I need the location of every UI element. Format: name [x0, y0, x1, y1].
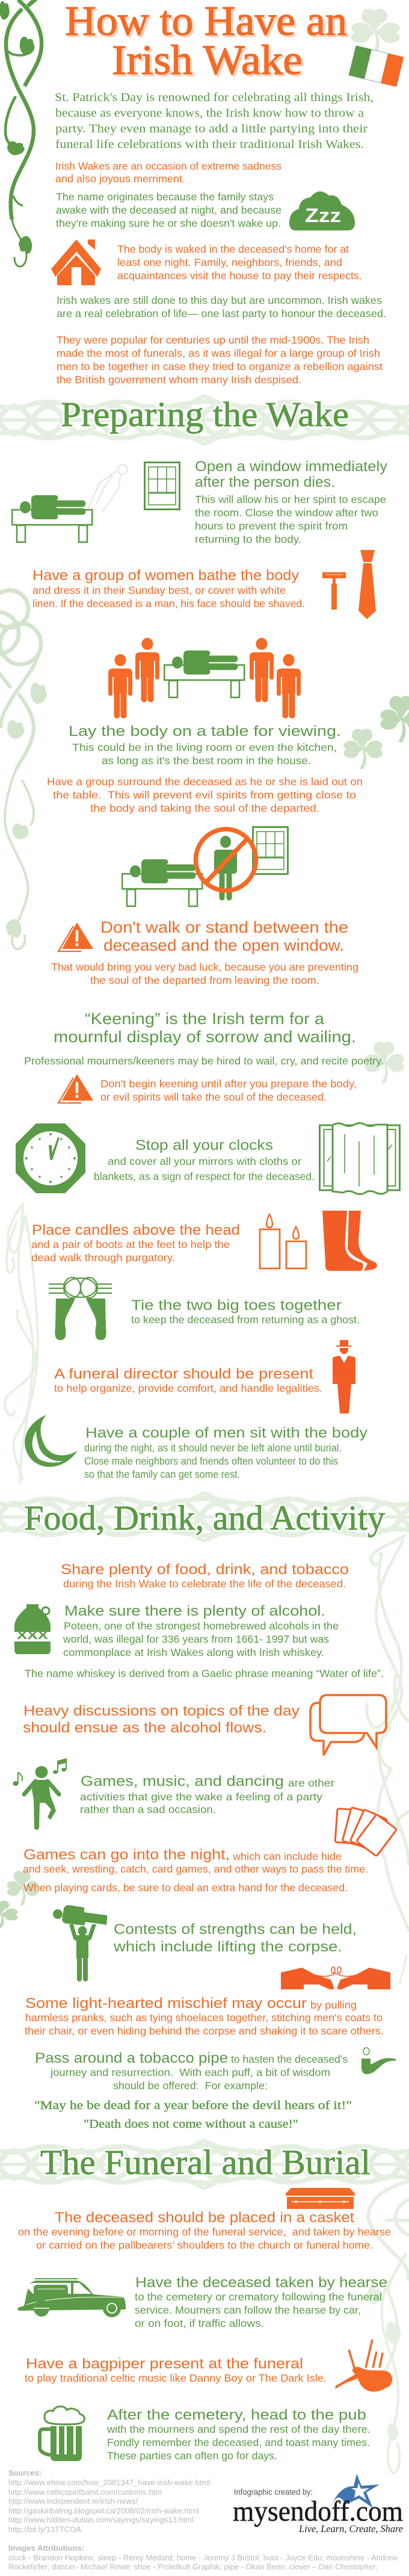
- text: don't begin keening: or evil spirits will take the soul of the deceased.: [100, 1091, 327, 1103]
- text: don't walk: That would bring you very bad luck, because you are preventing: [51, 961, 358, 973]
- title: Irish Wake: [112, 37, 303, 84]
- text: sayings: [34, 2099, 352, 2131]
- background: faint vine middle left: [5, 1203, 38, 1484]
- text: still done today: are a real celebration of life— one last party to honour the deceased.: [57, 307, 386, 320]
- background: shamrocks: [0, 8, 409, 1928]
- icon: dancer with music notes: [13, 1758, 67, 1830]
- icon: ghost rising from body: [12, 465, 128, 542]
- text: taken by hearse: [135, 2275, 387, 2329]
- text: games into the night: When playing cards, be sure to deal an extra hand for the deceased.: [23, 1882, 348, 1894]
- text: name origin: they're making sure he or she doesn't wake up.: [56, 217, 281, 229]
- sources: Sources:: [8, 2469, 42, 2477]
- icon: Irish flag: [349, 46, 404, 87]
- text: taken by hearse: to the cemetery or crematory following the funeral: [135, 2291, 382, 2303]
- text: body waked at home: least one night. Family, neighbors, friends, and: [117, 256, 342, 268]
- text: funeral director: A funeral director should be present: [54, 1366, 313, 1382]
- text: candles and boots: dead walk through purgatory.: [31, 1252, 175, 1264]
- text: plenty of alcohol: commonplace at Irish Wakes along with Irish whiskey.: [63, 1646, 324, 1658]
- logo: mysendoff.com: mysendoff.com: [233, 2495, 403, 2527]
- text: tobacco pipe: journey and resurrection. With each puff, a bit of wisdom: [50, 2066, 330, 2078]
- sources: http://www.hidden-dublin.com/sayings/sayings13.html: [8, 2516, 194, 2524]
- text: head to the pub: After the cemetery, head to the pub: [107, 2407, 366, 2423]
- icon: playing cards: [335, 1808, 397, 1856]
- text: open a window: returning to the body.: [195, 533, 301, 545]
- text: open a window: after the person dies.: [195, 474, 335, 490]
- icon: sleep cloud: Zzz: [305, 205, 341, 226]
- text: share plenty: during the Irish Wake to celebrate the life of the deceased.: [63, 1578, 346, 1590]
- text: contests of strength: [113, 1921, 357, 1955]
- text: funeral director: to help organize, provide comfort, and handle legalities.: [54, 1382, 322, 1394]
- heading: Preparing the Wake: Preparing the Wake: [61, 395, 349, 434]
- sources: http://bit.ly/13TTCOA: [8, 2525, 82, 2534]
- text: sit with the body: Close male neighbors and friends often volunteer to do this: [84, 1455, 338, 1467]
- sources: http://www.celticspiritband.com/customs.htm: [8, 2488, 162, 2497]
- text: heavy discussions: [23, 1703, 300, 1736]
- text: name origin: The name originates because the family stays: [56, 191, 274, 203]
- text: don't begin keening: Don't begin keening until after you prepare the body,: [100, 1078, 357, 1090]
- icon: pipe: [361, 2048, 396, 2074]
- text: mischief: harmless pranks, such as tying shoelaces together, stitching men's coats to: [25, 2012, 383, 2024]
- text: placed in a casket: The deceased should be placed in a casket: [55, 2210, 354, 2226]
- text: open a window: the room. Close the window after two: [195, 507, 378, 519]
- text: contests of strength: which include lifting the corpse.: [113, 1939, 342, 1955]
- text: tobacco pipe: should be offered: For example:: [113, 2080, 268, 2092]
- text: games music dancing: rather than a sad occasion.: [80, 1803, 216, 1815]
- text: tobacco pipe: [35, 2050, 348, 2092]
- text: bagpiper: [25, 2356, 327, 2384]
- background: faint vine right middle: [367, 1536, 409, 1985]
- text: lay the body: This could be in the living room or even the kitchen,: [72, 741, 337, 753]
- background: faint celtic knot: [0, 590, 41, 664]
- icon: moonshine jug: [14, 1604, 51, 1654]
- text: share plenty: Share plenty of food, drink, and tobacco: [61, 1561, 349, 1578]
- text: extreme sadness: [55, 160, 281, 185]
- image attributions: [8, 2544, 398, 2571]
- icon: beer mug: [40, 2406, 84, 2461]
- text: lay the body: Lay the body on a table for viewing.: [69, 723, 341, 740]
- text: body waked at home: [117, 243, 362, 282]
- icon: casket: [286, 2188, 355, 2209]
- text: name origin: [56, 191, 281, 229]
- text: body waked at home: acquaintances visit the house to pay their respects.: [117, 270, 362, 282]
- text: games music dancing: Games, music, and dancing: [81, 1773, 284, 1790]
- text: plenty of alcohol: Make sure there is plenty of alcohol.: [64, 1603, 325, 1619]
- icon: funeral director: [333, 1340, 355, 1413]
- text: surround the deceased: Have a group surround the deceased as he or she is laid out on: [47, 776, 363, 788]
- text: bathe the body: Have a group of women bathe the body: [32, 567, 300, 584]
- sources: http://www.independent.ie/irish-news/: [8, 2497, 138, 2506]
- title: How to Have an: [67, 0, 349, 46]
- text: taken by hearse: or on foot, if traffic allows.: [135, 2317, 264, 2329]
- text: tie toes: [131, 1297, 360, 1326]
- text: surround the deceased: the body and taking the soul of the departed.: [90, 802, 319, 814]
- text: placed in a casket: on the evening before or morning of the funeral service, and taken by hearse: [18, 2226, 391, 2238]
- icon: house: [51, 239, 101, 285]
- text: contests of strength: Contests of strengths can be held,: [114, 1921, 357, 1938]
- text: games into the night: [23, 1847, 368, 1894]
- text: surround the deceased: the table. This will prevent evil spirits from getting close to: [53, 789, 356, 801]
- image attributions: clock - Brandon Hopkins; sleep - Rémy Médard; home - Jeremy J Bristol; boot - Joyce Edu; moonshine - Andrew: [8, 2554, 398, 2562]
- text: open a window: hours to prevent the spirit from: [195, 520, 348, 532]
- icon: necktie: [358, 550, 376, 619]
- icon: hearse: [18, 2279, 126, 2317]
- icon: crescent moon: [25, 1415, 78, 1467]
- text: keening: mournful display of sorrow and wailing.: [54, 1028, 356, 1046]
- icon: shoes tied: [281, 1967, 390, 1989]
- text: don't walk: Don't walk or stand between the: [100, 918, 348, 936]
- icon: group surrounding body: [108, 638, 301, 715]
- text: don't walk: deceased and the open window.: [103, 936, 344, 954]
- text: plenty of alcohol: The name whiskey is derived from a Gaelic phrase meaning “Water of life”.: [25, 1667, 384, 1679]
- icon: warning triangle 2: [58, 1074, 93, 1103]
- logo: mysendoff.com: [233, 2474, 403, 2534]
- text: history: made the most of funerals, as it was illegal for a large group of Irish: [57, 347, 380, 359]
- text: tie toes: Tie the two big toes together: [131, 1297, 342, 1314]
- text: keening: “Keening” is the Irish term for a: [85, 1010, 325, 1028]
- text: head to the pub: These parties can often go for days.: [107, 2450, 277, 2462]
- icon: warning triangle: [58, 922, 93, 951]
- text: body waked at home: The body is waked in the deceased's home for at: [117, 243, 349, 255]
- intro paragraph: party. They even manage to add a little partying into their: [55, 122, 367, 135]
- icon: sleep cloud: [289, 191, 355, 230]
- text: games music dancing: [80, 1773, 334, 1815]
- title: [65, 0, 349, 85]
- icon: boots: [322, 1211, 377, 1271]
- text: still done today: Irish wakes are still done to this day but are uncommon. Irish wakes: [57, 294, 382, 306]
- icon: do not stand between body and window: [122, 827, 288, 906]
- text: open a window: This will allow his or her spirit to escape: [195, 493, 386, 505]
- image attributions: Rockefeller; dancer- Michael Rowe; shoe - Proletkult Graphik; pipe - Okan Benn; clover – Dan Christopher;: [8, 2563, 378, 2571]
- text: stop clocks: blankets, as a sign of respect for the deceased.: [94, 1170, 315, 1182]
- text: plenty of alcohol: Poteen, one of the strongest homebrewed alcohols in the: [64, 1620, 339, 1632]
- text: tobacco pipe: Pass around a tobacco pipe: [35, 2050, 228, 2066]
- text: plenty of alcohol: [25, 1603, 384, 1679]
- intro paragraph: St. Patrick's Day is renowned for celebrating all things Irish,: [55, 91, 374, 104]
- text: history: the British government whom many Irish despised.: [57, 374, 301, 386]
- text: games music dancing: activities that give the wake a feeling of a party: [80, 1791, 322, 1803]
- intro paragraph: because as everyone knows, the Irish know how to throw a: [55, 107, 364, 120]
- text: lay the body: [69, 723, 341, 767]
- icon: covered mirror: [320, 1123, 399, 1194]
- text: head to the pub: [106, 2407, 371, 2462]
- text: stop clocks: and cover all your mirrors with cloths or: [108, 1155, 301, 1167]
- text: heavy discussions: should ensue as the alcohol flows.: [23, 1720, 266, 1736]
- heading: Preparing the Wake: [0, 395, 409, 444]
- text: bagpiper: to play traditional celtic music like Danny Boy or The Dark Isle.: [25, 2372, 327, 2384]
- icon: candles: [260, 1214, 306, 1268]
- title: Irish Wake: [112, 37, 303, 84]
- icon: bagpipes: [335, 2340, 392, 2392]
- icon: razor: [322, 572, 346, 610]
- text: history: men to be together in case they tried to organize a rebellion against: [57, 360, 383, 372]
- background: faint vine right lower: [367, 2181, 409, 2473]
- intro paragraph: [55, 91, 374, 151]
- heading: The Funeral and Burial: [0, 2140, 409, 2188]
- icon: lifting the corpse: [53, 1905, 107, 1979]
- sources: http://www.ehow.com/how_2081347_have-irish-wake.html: [8, 2479, 210, 2487]
- text: bathe the body: and dress it in their Sunday best, or cover with white: [32, 584, 286, 596]
- text: stop clocks: [94, 1137, 315, 1182]
- text: history: [57, 334, 383, 386]
- text: heavy discussions: Heavy discussions on topics of the day: [23, 1703, 300, 1719]
- text: sit with the body: during the night, as it should never be left alone until burial.: [84, 1442, 342, 1454]
- icon: window: [144, 462, 179, 509]
- text: sit with the body: so that the family can get some rest.: [84, 1468, 240, 1480]
- icon: toes tied: [49, 1277, 112, 1340]
- text: bathe the body: [32, 567, 305, 610]
- text: open a window: Open a window immediately: [195, 459, 388, 475]
- text: tie toes: to keep the deceased from returning as a ghost.: [131, 1314, 360, 1326]
- text: open a window: [195, 459, 388, 545]
- text: candles and boots: Place candles above the head: [32, 1222, 240, 1238]
- text: tobacco pipe: to hasten the deceased's: [231, 2053, 348, 2065]
- text: taken by hearse: service. Mourners can follow the hearse by car,: [135, 2304, 361, 2316]
- heading: Food, Drink, and Activity: Food, Drink, and Activity: [24, 1498, 385, 1537]
- text: name origin: awake with the deceased at night, and because: [56, 204, 281, 216]
- text: keening: Professional mourners/keeners may be hired to wail, cry, and recite poetry.: [24, 1055, 384, 1067]
- text: funeral director: [54, 1366, 322, 1394]
- text: mischief: Some light-hearted mischief may occur: [25, 1995, 307, 2012]
- text: lay the body: as long as it's the best room in the house.: [102, 755, 311, 767]
- heading: The Funeral and Burial: The Funeral and Burial: [40, 2143, 371, 2182]
- text: sit with the body: Have a couple of men sit with the body: [85, 1425, 368, 1441]
- background: faint vine upper left: [0, 650, 47, 949]
- text: bagpiper: Have a bagpiper present at the funeral: [26, 2356, 303, 2372]
- heading: Food, Drink, and Activity: Food, Drink, and Activity: [24, 1498, 385, 1537]
- icon: moonshine jug: XXX: [17, 1629, 48, 1642]
- image attributions: Images Attributions:: [8, 2544, 84, 2553]
- text: still done today: [57, 294, 386, 320]
- text: candles and boots: and a pair of boots at the feet to help the: [31, 1238, 230, 1250]
- text: head to the pub: with the mourners and spend the rest of the day there.: [106, 2423, 371, 2435]
- heading: Preparing the Wake: Preparing the Wake: [61, 395, 349, 434]
- text: bathe the body: linen. If the deceased is a man, his face should be shaved.: [32, 598, 305, 610]
- left vine: [0, 0, 42, 267]
- logo: mysendoff.com: Live, Learn, Create, Share: [298, 2523, 403, 2534]
- text: games into the night: Games can go into the night,: [23, 1847, 230, 1863]
- text: games music dancing: are other: [288, 1777, 334, 1789]
- text: extreme sadness: Irish Wakes are an occasion of extreme sadness: [55, 160, 281, 172]
- text: sayings: "May he be dead for a year before the devil hears of it!": [34, 2099, 352, 2112]
- text: candles and boots: [31, 1222, 240, 1264]
- text: extreme sadness: and also joyous merriment.: [55, 173, 185, 185]
- text: keening: [24, 1010, 384, 1067]
- text: don't walk: the soul of the departed from leaving the room.: [90, 974, 319, 986]
- sources: [8, 2469, 210, 2534]
- text: don't begin keening: [100, 1078, 357, 1103]
- icon: clock: [16, 1123, 85, 1193]
- text: share plenty: [61, 1561, 349, 1590]
- text: don't walk: [51, 918, 358, 986]
- text: placed in a casket: or carried on the pallbearers’ shoulders to the church or funeral home.: [36, 2239, 373, 2251]
- intro paragraph: funeral life celebrations with their traditional Irish Wakes.: [55, 138, 364, 151]
- text: games into the night: which can include hide: [232, 1850, 342, 1862]
- text: taken by hearse: Have the deceased taken by hearse: [135, 2275, 387, 2291]
- text: sayings: "Death does not come without a cause!": [84, 2117, 298, 2131]
- text: stop clocks: Stop all your clocks: [135, 1137, 273, 1154]
- heading: The Funeral and Burial: The Funeral and Burial: [40, 2143, 371, 2182]
- sources: http://gaskinbalrog.blogspot.ca/2008/02/irish-wake.html: [8, 2507, 199, 2515]
- text: head to the pub: Fondly remember the deceased, and toast many times.: [107, 2436, 370, 2448]
- text: surround the deceased: [47, 776, 363, 814]
- text: placed in a casket: [18, 2210, 391, 2251]
- text: games into the night: and seek, wrestling, catch, card games, and other ways to pass the time.: [23, 1863, 368, 1875]
- text: mischief: [25, 1995, 384, 2037]
- text: mischief: their chair, or even hiding behind the corpse and shaking it to scare others.: [25, 2025, 384, 2037]
- icon: speech bubbles: [310, 1695, 386, 1755]
- logo: mysendoff.com: Infographic created by:: [234, 2488, 313, 2497]
- text: history: They were popular for centuries up until the mid-1900s. The Irish: [57, 334, 369, 346]
- text: sit with the body: [84, 1425, 368, 1480]
- text: mischief: by pulling: [310, 1999, 357, 2011]
- text: plenty of alcohol: world, was illegal for 336 years from 1661- 1997 but was: [63, 1633, 329, 1645]
- title: Irish Wake: [114, 39, 304, 85]
